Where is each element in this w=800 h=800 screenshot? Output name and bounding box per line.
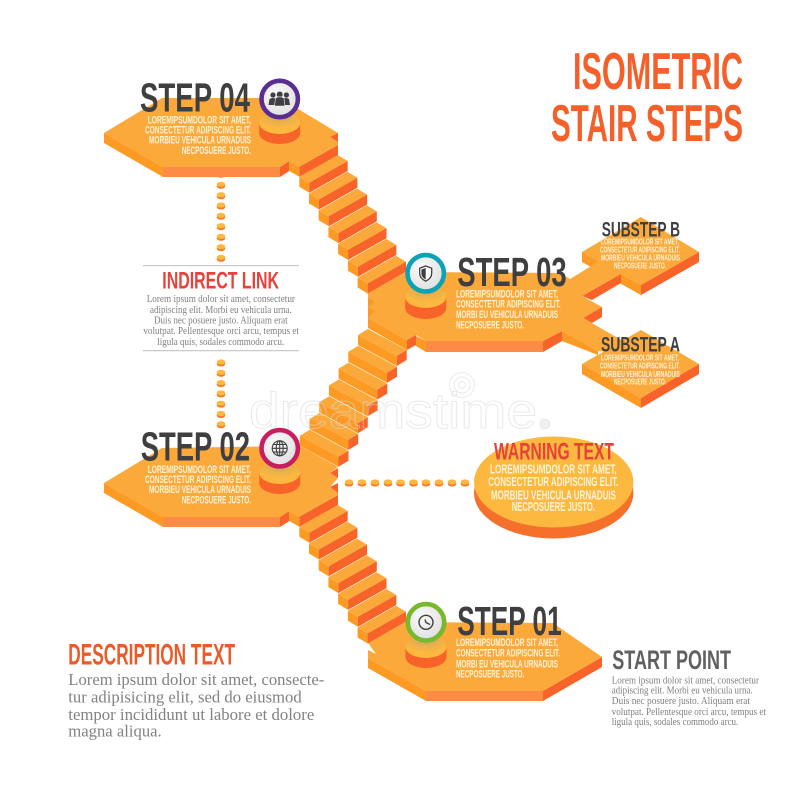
dotted connector: step 04 to indirect link xyxy=(217,171,225,262)
text block: volutpat. Pellentesque orci arcu, tempus et xyxy=(612,707,766,718)
step 03 group xyxy=(405,249,567,331)
text block: tempor incididunt ut labore et dolore xyxy=(68,705,314,724)
text block: CONSECTETUR ADIPISCING ELIT. xyxy=(456,298,561,310)
text block: Duis nec posuere justo. Aliquam erat xyxy=(612,696,750,707)
text block: volutpat. Pellentesque orci arcu, tempus et xyxy=(143,326,299,337)
heading: SUBSTEP B xyxy=(602,218,680,242)
stairs: step 01 up to step 02 xyxy=(299,505,406,644)
text block: LOREMIPSUMDOLOR SIT AMET, xyxy=(456,289,558,301)
text block xyxy=(612,675,766,728)
text block: Lorem ipsum dolor sit amet, consectetur xyxy=(612,675,759,686)
text block: CONSECTETUR ADIPISCING ELIT. xyxy=(600,246,680,254)
substep B platform xyxy=(582,217,699,295)
text block: LOREMIPSUMDOLOR SIT AMET, xyxy=(148,464,251,476)
step 03 platform with branches xyxy=(368,257,630,355)
text block xyxy=(456,289,561,331)
dotted connector: step 02 to warning xyxy=(345,479,469,486)
text block: NECPOSUERE JUSTO. xyxy=(182,494,251,506)
stairs: step 03 up to step 04 xyxy=(299,155,406,294)
text block xyxy=(600,354,680,387)
text block: NECPOSUERE JUSTO. xyxy=(614,261,666,270)
text block: CONSECTETUR ADIPISCING ELIT. xyxy=(456,648,560,660)
text block: NECPOSUERE JUSTO. xyxy=(614,378,666,387)
text block: CONSECTETUR ADIPISCING ELIT. xyxy=(488,474,618,489)
text block: MORBI EU VEHICULA URNADUIS xyxy=(456,658,558,670)
panel: indirect link xyxy=(143,265,299,351)
text block: Duis nec posuere justo. Aliquam erat xyxy=(154,316,288,326)
text block: LOREMIPSUMDOLOR SIT AMET, xyxy=(490,461,617,476)
text block xyxy=(600,238,680,270)
title xyxy=(551,43,743,153)
heading: INDIRECT LINK xyxy=(162,267,279,294)
text block: NECPOSUERE JUSTO. xyxy=(182,145,251,157)
text block: MORBIEU VEHICULA URNADUIS xyxy=(601,253,680,262)
text block: LOREMIPSUMDOLOR SIT AMET, xyxy=(456,637,558,649)
text block: LOREMIPSUMDOLOR SIT AMET, xyxy=(601,354,679,363)
heading: STEP 04 xyxy=(140,75,250,121)
heading: START POINT xyxy=(612,645,731,675)
stairs: step 02 up to step 03 xyxy=(319,329,407,433)
text block: magna aliqua. xyxy=(68,722,162,741)
text block: NECPOSUERE JUSTO. xyxy=(456,319,524,331)
substep B labels xyxy=(600,218,680,270)
text block xyxy=(488,461,618,514)
cylinder pedestal xyxy=(406,636,446,668)
text block: LOREMIPSUMDOLOR SIT AMET, xyxy=(148,114,251,126)
dotted connector: indirect link to step 02 xyxy=(217,359,225,428)
text block: adipiscing elit. Morbi eu vehicula urna. xyxy=(612,685,753,696)
watermark: dreamstime xyxy=(249,383,537,439)
icon: people xyxy=(262,81,298,117)
callout: warning disc xyxy=(474,436,633,538)
stairs: lower steps of the flight into step 02 xyxy=(300,413,358,467)
text block: Lorem ipsum dolor sit amet, consecte- xyxy=(68,670,324,689)
heading: SUBSTEP A xyxy=(601,333,680,357)
text block: CONSECTETUR ADIPISCING ELIT. xyxy=(600,362,680,370)
step 02 group xyxy=(141,424,300,506)
text block: CONSECTETUR ADIPISCING ELIT. xyxy=(145,124,251,136)
step 04 group xyxy=(140,75,300,157)
step 01 group xyxy=(406,598,562,680)
panel: start point xyxy=(612,645,766,728)
text block: NECPOSUERE JUSTO. xyxy=(456,668,524,680)
icon: clock xyxy=(408,604,444,640)
text block: LOREMIPSUMDOLOR SIT AMET, xyxy=(601,238,679,247)
step 04 platform xyxy=(104,98,338,177)
text block xyxy=(145,114,251,157)
cylinder pedestal xyxy=(259,462,300,494)
step 01 platform xyxy=(368,622,602,701)
step 02 platform xyxy=(104,446,338,527)
text block xyxy=(145,464,251,506)
text block xyxy=(143,294,299,348)
cylinder pedestal xyxy=(405,286,446,319)
icon: shield xyxy=(408,255,444,292)
substep A platform xyxy=(582,330,699,408)
text block: Lorem ipsum dolor sit amet, consectetur xyxy=(147,294,295,305)
text block: MORBIEU VEHICULA URNADUIS xyxy=(601,370,680,379)
text block: MORBIEU VEHICULA URNADUIS xyxy=(149,134,251,146)
heading: WARNING TEXT xyxy=(494,438,614,465)
text block: ligula quis, sodales commodo arcu. xyxy=(612,717,738,728)
text block: MORBI EU VEHICULA URNADUIS xyxy=(456,309,558,321)
text block: ligula quis, sodales commodo arcu. xyxy=(157,337,284,348)
heading: STEP 01 xyxy=(457,598,562,644)
text block: CONSECTETUR ADIPISCING ELIT. xyxy=(145,474,251,486)
text block xyxy=(68,670,324,741)
panel: description text xyxy=(68,638,324,741)
heading: DESCRIPTION TEXT xyxy=(68,638,235,671)
text block: MORBIEU VEHICULA URNADUIS xyxy=(149,484,251,496)
disc xyxy=(474,436,633,538)
icon: globe xyxy=(262,430,298,466)
text block: adipiscing elit. Morbi eu vehicula urna. xyxy=(150,305,292,316)
text block: MORBIEU VEHICULA URNADUIS xyxy=(491,487,616,502)
substep A labels xyxy=(600,333,680,387)
text block xyxy=(456,637,560,680)
heading: STEP 02 xyxy=(141,424,250,470)
text block: NECPOSUERE JUSTO. xyxy=(512,499,595,514)
cylinder pedestal xyxy=(259,112,300,144)
text block: tur adipisicing elit, sed do eiusmod xyxy=(68,688,302,707)
heading: STEP 03 xyxy=(457,249,567,295)
